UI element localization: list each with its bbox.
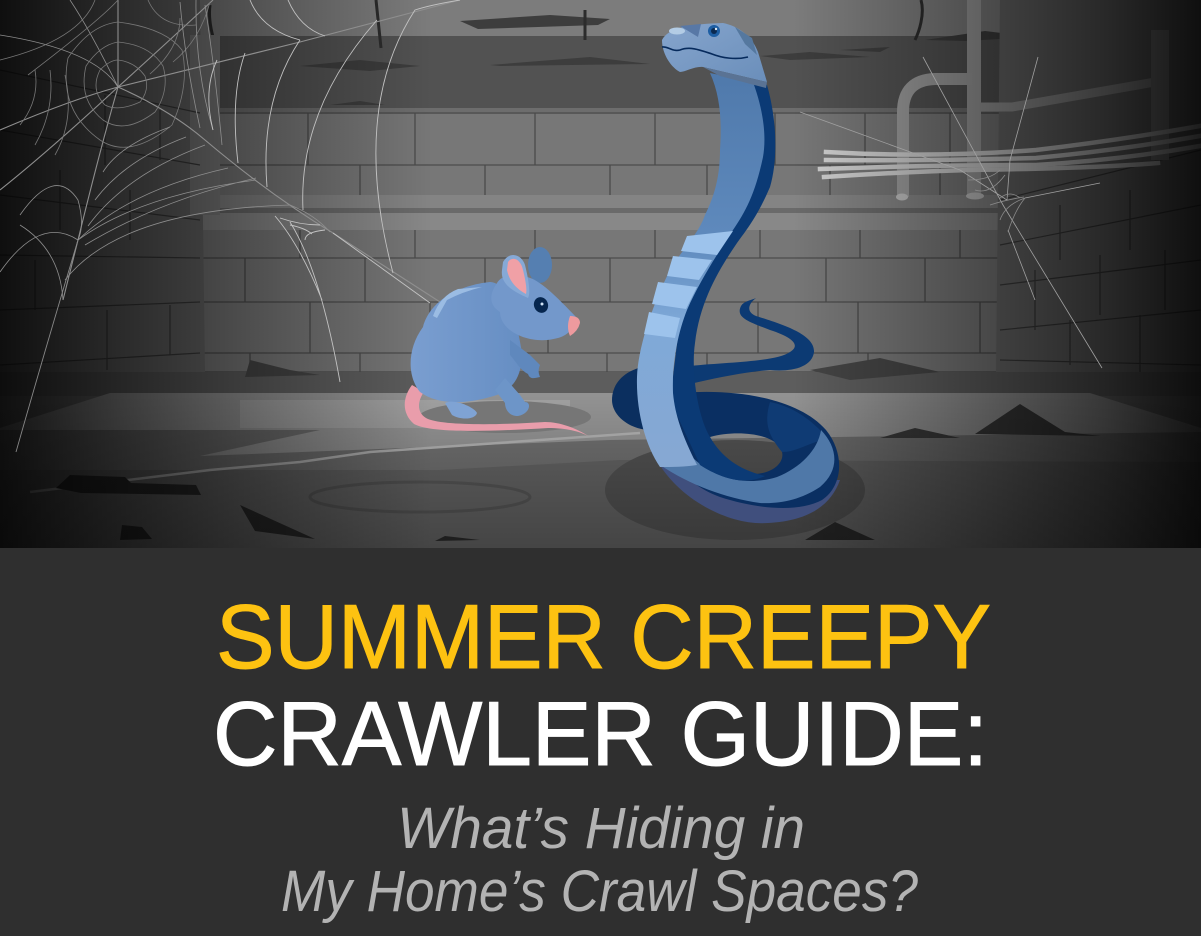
- snake: dark back of neck: [670, 80, 775, 480]
- title line 1: SUMMER CREEPY: [216, 587, 991, 688]
- snake: neck and belly: [637, 73, 764, 467]
- mouse: [405, 247, 591, 437]
- pipes: [820, 0, 1200, 200]
- right side wall: [996, 0, 1201, 440]
- spider web: long strands: [16, 0, 460, 452]
- snake: back coil: [612, 367, 647, 430]
- floor: [0, 358, 1201, 548]
- subtitle line 2: My Home’s Crawl Spaces?: [281, 859, 919, 924]
- illustration: crawl space scene: [0, 0, 1201, 548]
- vignette: [0, 0, 1201, 548]
- title panel: [213, 587, 991, 924]
- snake: head: [662, 23, 767, 82]
- brick joints: [200, 113, 1010, 372]
- snake: belly scales: [644, 231, 733, 338]
- subtitle line 1: What’s Hiding in: [397, 796, 805, 861]
- snake: tail: [690, 298, 814, 384]
- spider web: right: [800, 57, 1102, 368]
- snake: purple under-shadow: [658, 462, 840, 523]
- spider web: top left: [0, 0, 460, 302]
- left side wall: [0, 0, 220, 440]
- snake: lower band: [660, 430, 834, 503]
- title line 2: CRAWLER GUIDE:: [213, 684, 988, 785]
- snake: loop: [660, 392, 839, 508]
- ceiling and back wall: [0, 0, 1201, 548]
- snake: [612, 23, 840, 523]
